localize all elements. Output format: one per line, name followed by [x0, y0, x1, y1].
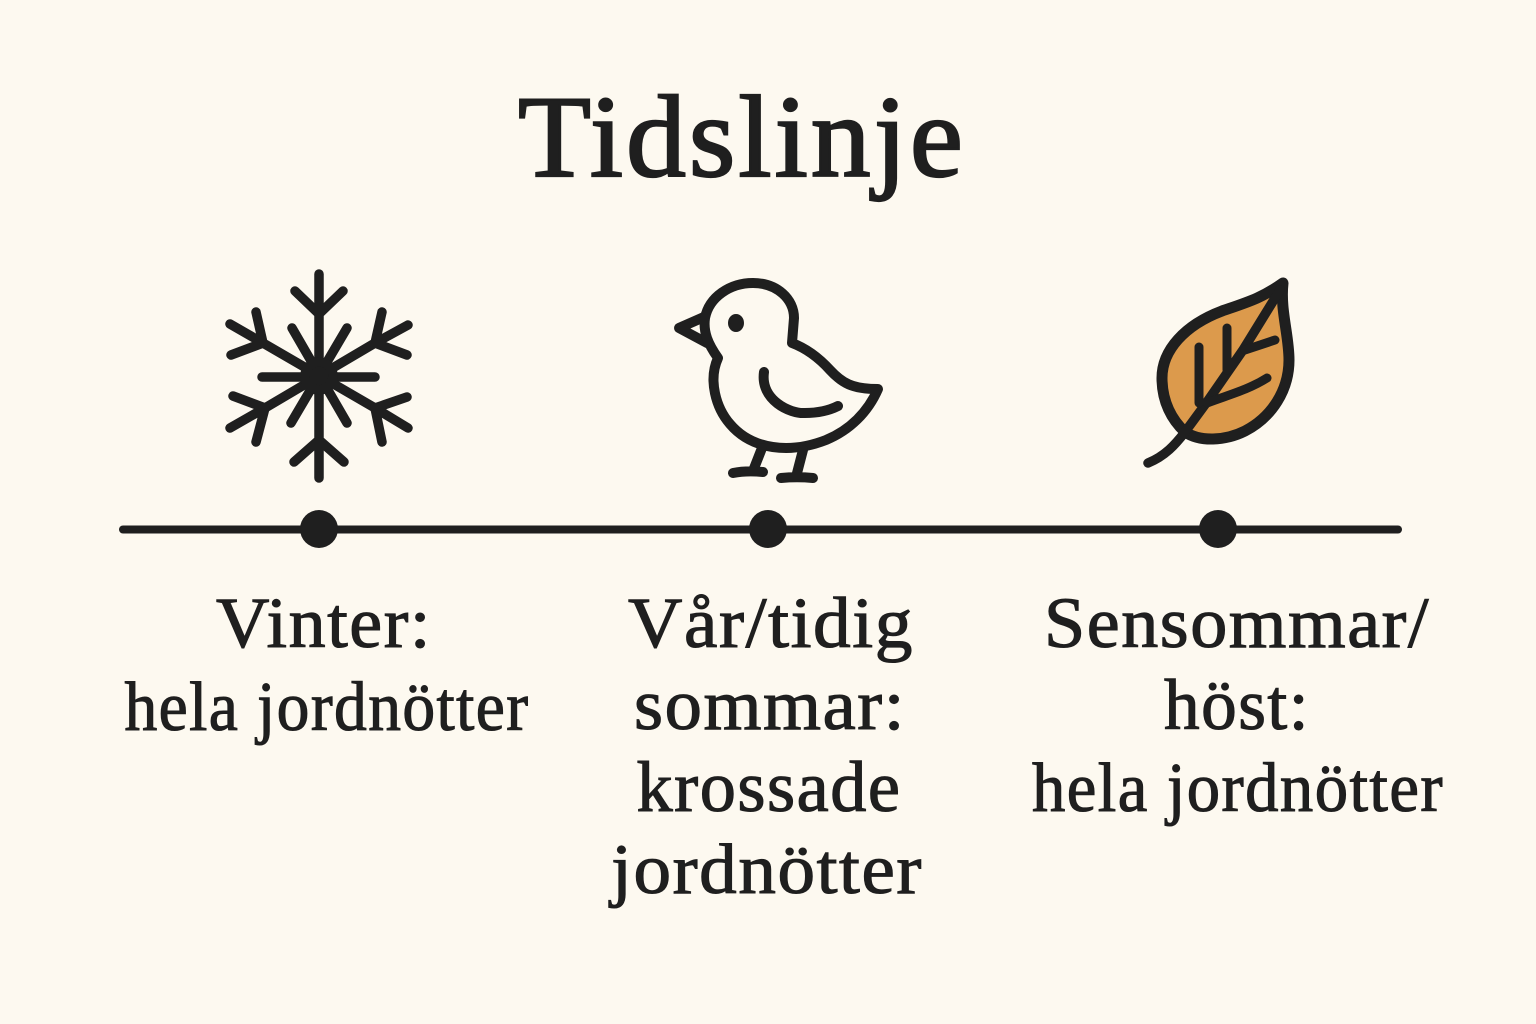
- label: autumn: höst:: [1164, 665, 1310, 745]
- label: spring: krossade: [636, 747, 902, 827]
- label: autumn: hela jordnötter: [1032, 750, 1444, 827]
- label: winter: [124, 583, 530, 746]
- title: Tidslinje: [518, 73, 966, 202]
- label: autumn: Sensommar/: [1044, 583, 1430, 663]
- icon: snowflake: [230, 274, 408, 478]
- label: winter: Vinter:: [216, 583, 432, 663]
- marker: winter: [300, 510, 338, 548]
- icon: leaf: [1148, 283, 1289, 463]
- marker: autumn: [1199, 510, 1237, 548]
- marker: spring: [749, 510, 787, 548]
- label: spring: Vår/tidig: [628, 583, 914, 663]
- label: spring: jordnötter: [608, 831, 923, 909]
- label: spring: sommar:: [634, 665, 906, 745]
- label: autumn: [1032, 583, 1444, 827]
- label: winter: hela jordnötter: [124, 669, 530, 746]
- icon: chick: [679, 283, 878, 478]
- timeline axis: [123, 510, 1398, 548]
- label: spring: [608, 583, 923, 909]
